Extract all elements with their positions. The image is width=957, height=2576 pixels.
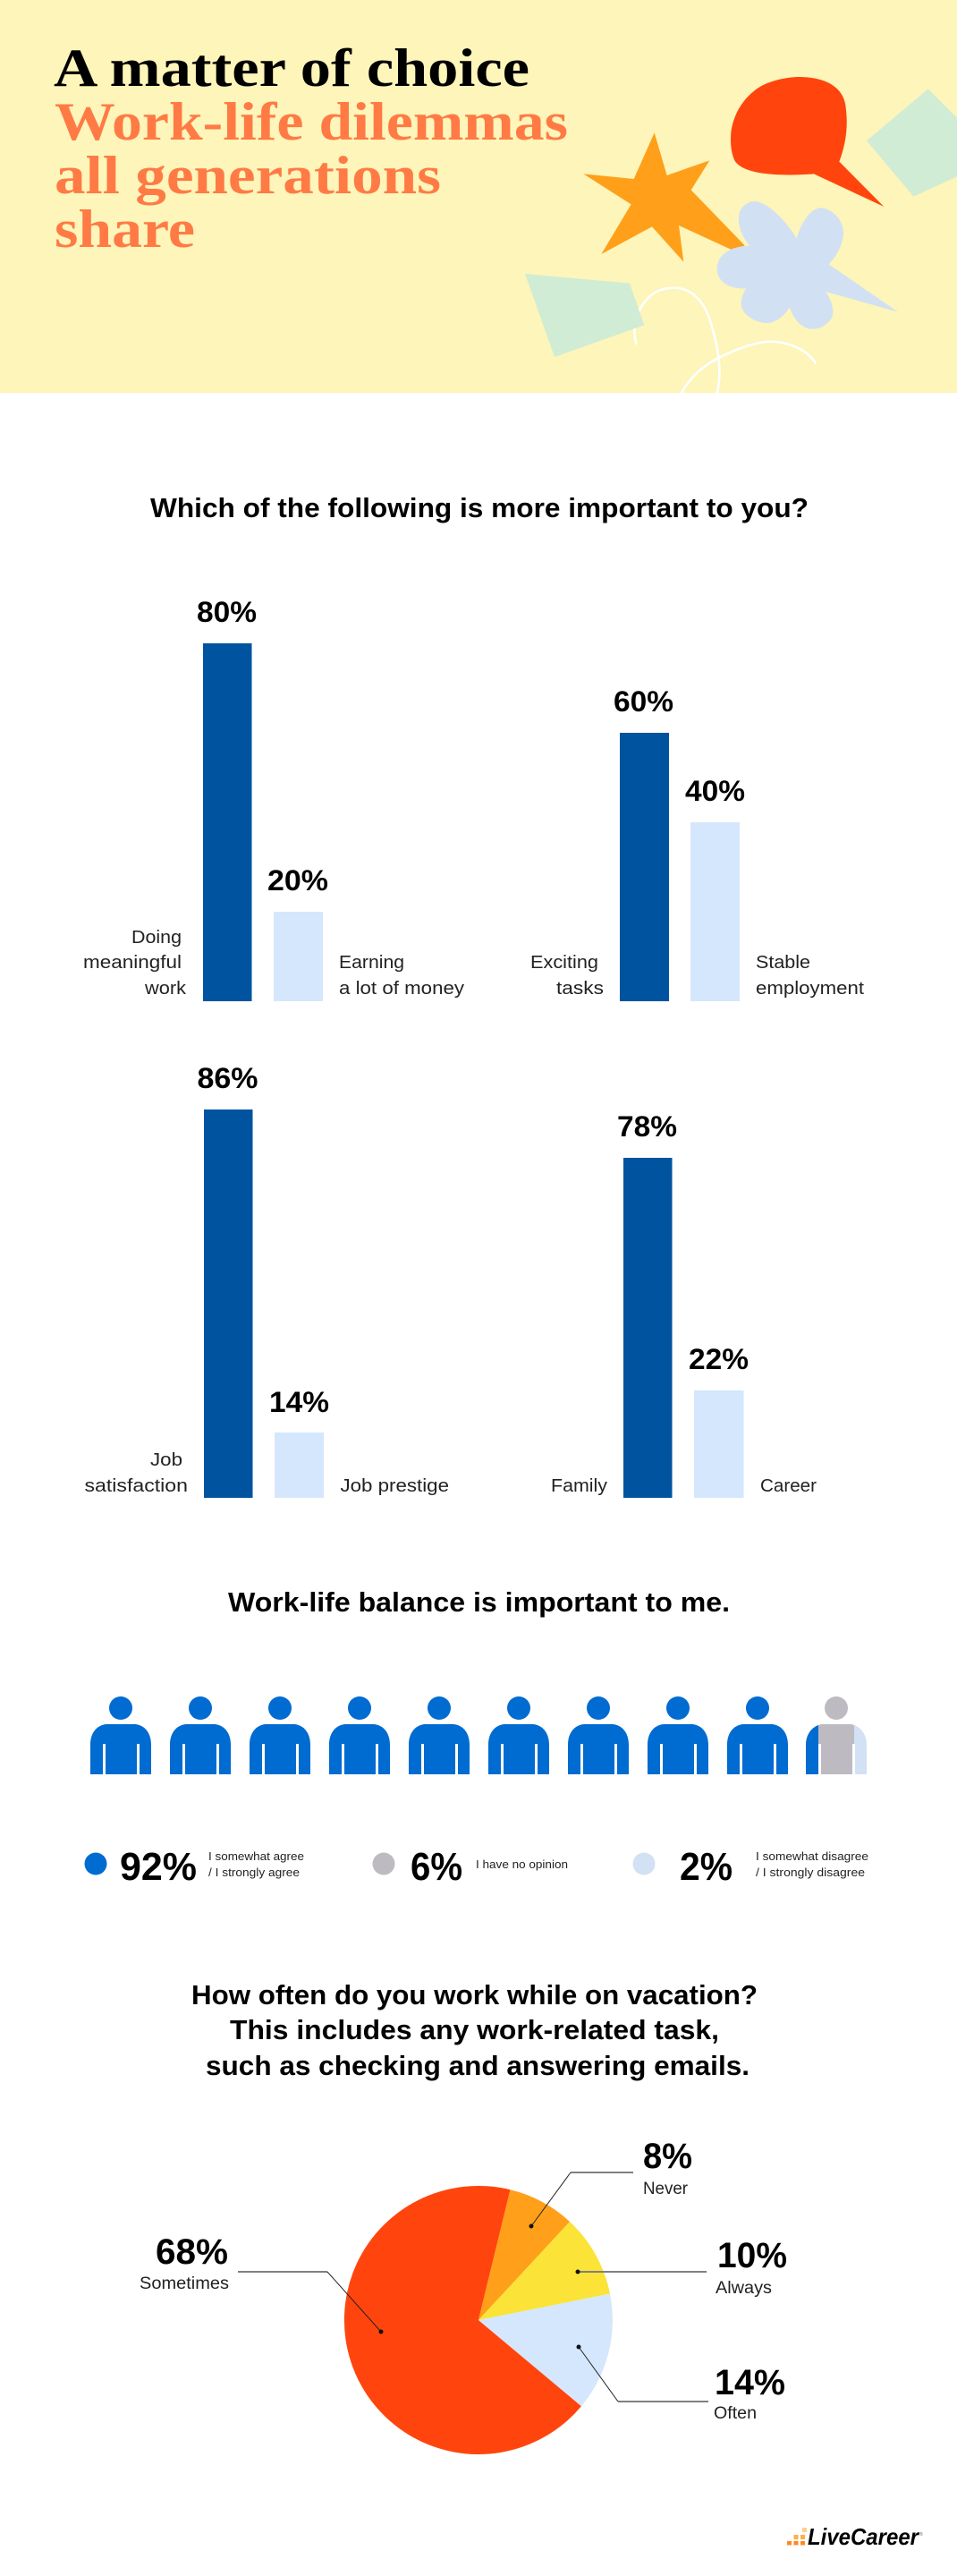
heading: working on vacation: How often do you work while on vacation? bbox=[191, 1979, 758, 2011]
bar chart: meaningful work vs money: Earning bbox=[339, 953, 404, 973]
pie chart: vacation work frequency bbox=[344, 2186, 613, 2454]
bar chart: job satisfaction vs prestige: 86% bbox=[197, 1062, 258, 1094]
title: Work-life dilemmas bbox=[55, 92, 568, 151]
heading: which is more important: Which of the following is more important to you? bbox=[150, 492, 809, 523]
legend: 2% disagree: I somewhat disagree bbox=[756, 1849, 868, 1863]
bar chart: meaningful work vs money: Doing bbox=[131, 928, 182, 948]
bar chart: meaningful work vs money: a lot of money bbox=[339, 979, 464, 999]
callout: often 14%: 14% bbox=[715, 2363, 785, 2402]
bar chart: meaningful work vs money: work bbox=[144, 979, 187, 999]
legend: 92% agree: 92% bbox=[120, 1845, 197, 1889]
heading: working on vacation bbox=[191, 1979, 758, 2081]
bar chart: exciting tasks vs stable employment: employment bbox=[756, 979, 864, 999]
bar chart: job satisfaction vs prestige: 14% bbox=[269, 1386, 329, 1418]
icon: orange star bbox=[583, 132, 745, 262]
bar chart: meaningful work vs money: 20% bbox=[267, 864, 328, 897]
bar chart: exciting tasks vs stable employment: 40% bbox=[685, 775, 745, 807]
decorative white lines bbox=[634, 288, 816, 400]
callout: sometimes 68%: Sometimes bbox=[140, 2274, 229, 2293]
bar chart: exciting tasks vs stable employment: 60% bbox=[614, 685, 673, 718]
legend: 6% no opinion: 6% bbox=[411, 1845, 462, 1889]
callout: never 8% bbox=[529, 2137, 692, 2228]
callout: sometimes 68%: 68% bbox=[156, 2232, 228, 2272]
title: all generations bbox=[55, 146, 441, 205]
callout: always 10%: Always bbox=[716, 2279, 772, 2298]
callout: sometimes 68% bbox=[140, 2232, 383, 2334]
pictogram: ten people bbox=[90, 1696, 867, 1774]
illustration: abstract shapes bbox=[525, 77, 957, 400]
bar chart: exciting tasks vs stable employment: Stable bbox=[756, 953, 810, 973]
bar chart: family vs career: 22% bbox=[689, 1343, 749, 1375]
bar chart: job satisfaction vs prestige: Job prestige bbox=[340, 1476, 449, 1496]
bar chart: job satisfaction vs prestige: satisfaction bbox=[84, 1476, 188, 1496]
title: share bbox=[55, 200, 195, 259]
bar chart: family vs career bbox=[551, 1110, 817, 1498]
bar chart: meaningful work vs money: 80% bbox=[197, 596, 257, 628]
legend: 6% no opinion bbox=[372, 1845, 568, 1889]
callout: never 8%: Never bbox=[643, 2180, 689, 2198]
legend: 2% disagree: 2% bbox=[680, 1845, 733, 1889]
bar chart: job satisfaction vs prestige bbox=[84, 1062, 449, 1498]
legend: 92% agree: I somewhat agree bbox=[208, 1849, 304, 1863]
callout: often 14%: Often bbox=[714, 2404, 757, 2423]
legend: 2% disagree: / I strongly disagree bbox=[756, 1866, 865, 1879]
bar chart: family vs career: 78% bbox=[617, 1110, 677, 1143]
icon: blue flower bbox=[717, 201, 898, 329]
legend: 6% no opinion: I have no opinion bbox=[476, 1858, 568, 1871]
icon: green quadrilateral bbox=[525, 274, 644, 357]
header banner bbox=[0, 0, 957, 400]
bar chart: exciting tasks vs stable employment: tasks bbox=[556, 979, 604, 999]
heading: work-life balance: Work-life balance is important to me. bbox=[228, 1586, 730, 1618]
callout: never 8%: 8% bbox=[643, 2137, 692, 2176]
logo: LiveCareer: LiveCareer bbox=[808, 2523, 920, 2550]
bar chart: exciting tasks vs stable employment: Exciting bbox=[530, 953, 598, 973]
bar chart: family vs career: Family bbox=[551, 1476, 607, 1496]
bar chart: family vs career: Career bbox=[760, 1476, 817, 1496]
bar chart: meaningful work vs money: meaningful bbox=[83, 953, 182, 973]
heading: working on vacation: This includes any work-related task, bbox=[230, 2014, 719, 2045]
legend: 92% agree: / I strongly agree bbox=[208, 1866, 300, 1879]
heading: working on vacation: such as checking and answering emails. bbox=[206, 2050, 750, 2081]
bar chart: job satisfaction vs prestige: Job bbox=[150, 1450, 182, 1470]
callout: always 10% bbox=[576, 2236, 787, 2298]
logo: LiveCareer: ® bbox=[919, 2531, 923, 2538]
icon: green diamond bbox=[867, 89, 957, 197]
title bbox=[54, 38, 568, 259]
icon: speech bubble bbox=[731, 77, 884, 207]
callout: often 14% bbox=[576, 2344, 785, 2423]
legend: 2% disagree bbox=[633, 1845, 868, 1889]
legend: 92% agree bbox=[84, 1845, 304, 1889]
bar chart: meaningful work vs money bbox=[83, 596, 464, 1001]
callout: always 10%: 10% bbox=[717, 2236, 787, 2275]
title: A matter of choice bbox=[54, 38, 529, 98]
bar chart: exciting tasks vs stable employment bbox=[530, 685, 864, 1001]
